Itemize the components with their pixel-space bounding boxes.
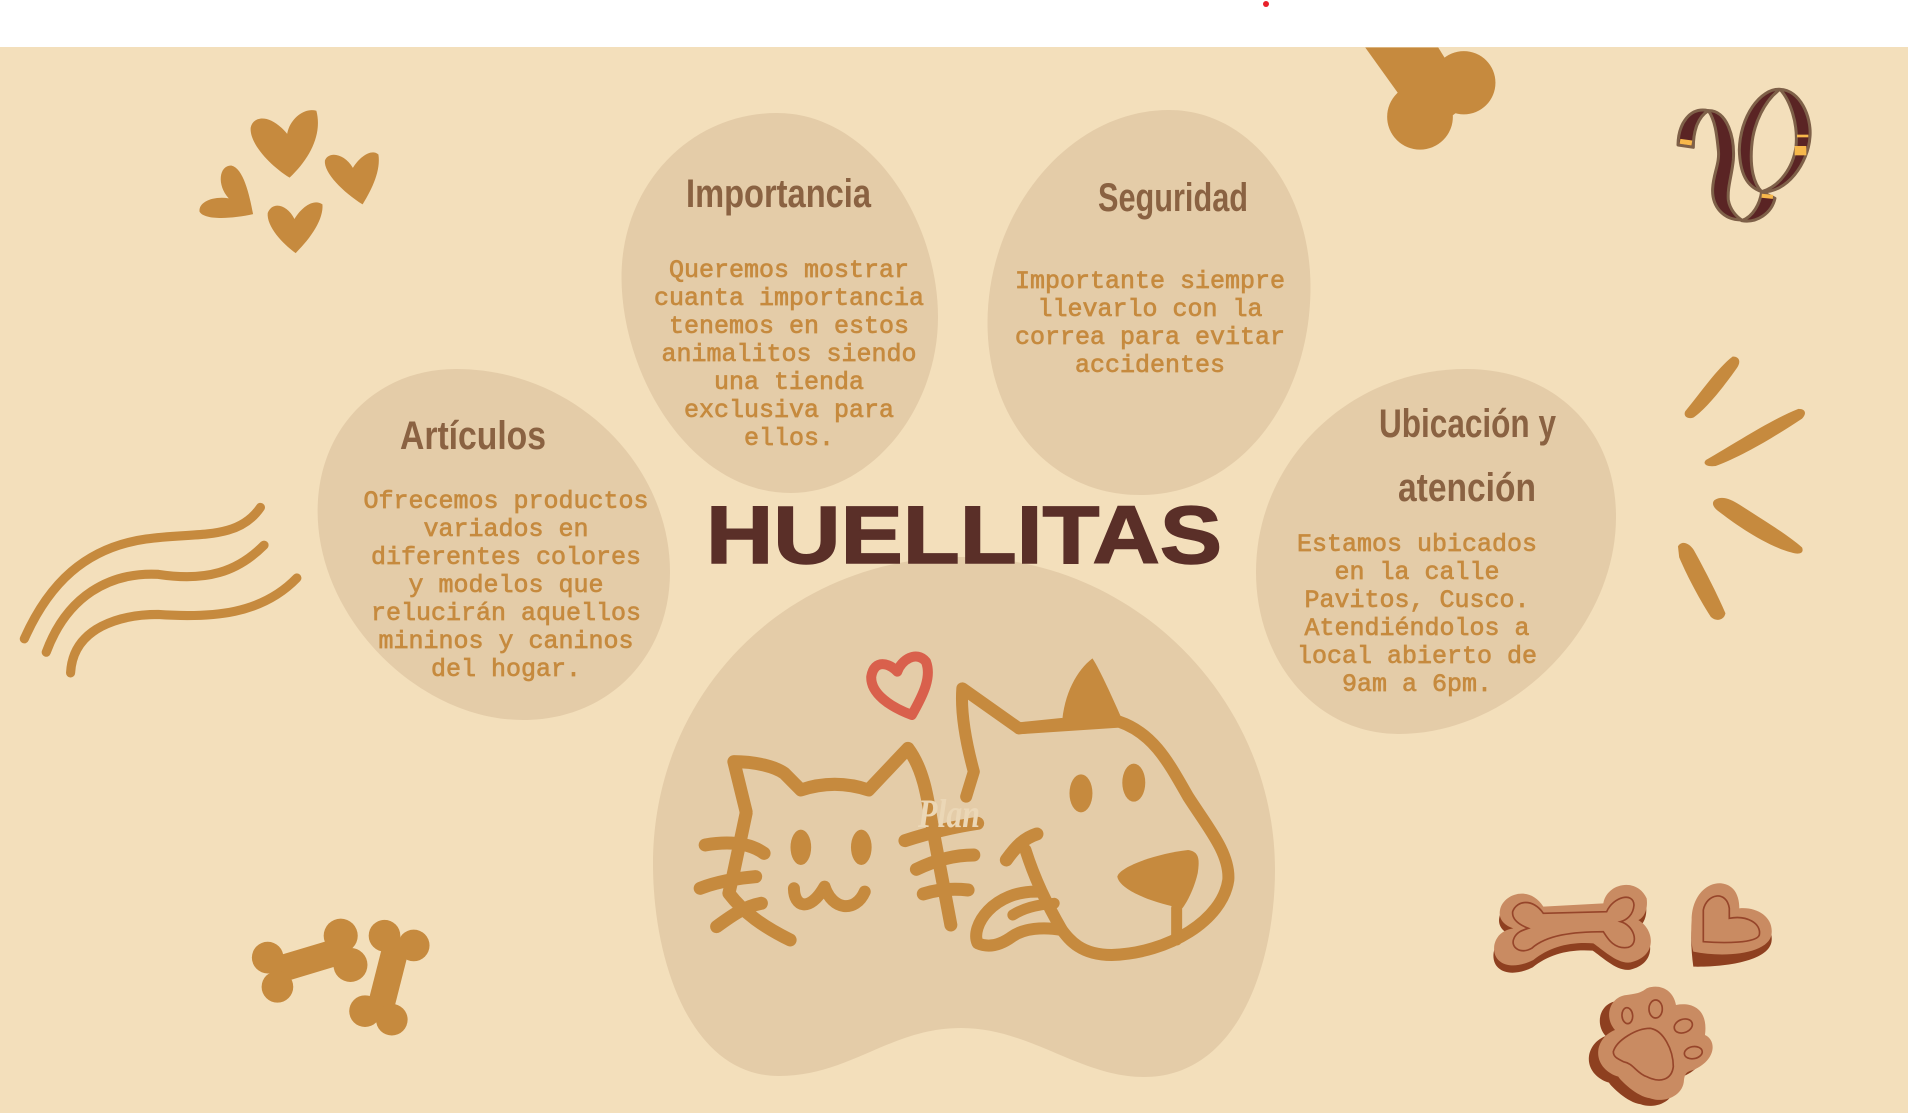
panel: importancia — [622, 113, 938, 493]
text: articulos body: variados en — [423, 515, 589, 544]
blob: importancia toe — [622, 113, 938, 493]
text: importancia body: una tienda — [714, 368, 864, 397]
heading: seguridad: Seguridad — [1098, 176, 1248, 220]
text: articulos body: diferentes colores — [371, 543, 641, 572]
watermark text: Plan — [917, 791, 980, 836]
text: ubicacion body: Estamos ubicados — [1297, 530, 1537, 559]
text: seguridad body: Importante siempre — [1015, 267, 1285, 296]
heading: ubicacion: atención — [1398, 466, 1536, 510]
icon: top bone — [1365, 47, 1495, 150]
text: ubicacion body: en la calle — [1334, 558, 1500, 587]
title: HUELLITAS — [706, 490, 1222, 581]
icon: radiating strokes — [1678, 357, 1805, 620]
text: ubicacion body: local abierto de — [1297, 642, 1537, 671]
panel: main paw pad — [653, 557, 1275, 1077]
illustration: dog — [962, 658, 1228, 955]
blob: ubicacion toe — [1256, 369, 1616, 734]
icon: collar — [1678, 89, 1810, 221]
icon: hearts — [199, 110, 379, 253]
heading: articulos: Artículos — [400, 414, 546, 458]
text: ubicacion body: 9am a 6pm. — [1342, 670, 1492, 699]
heading: importancia: Importancia — [686, 172, 872, 216]
panel: articulos — [318, 369, 670, 720]
panel: seguridad — [988, 110, 1310, 495]
text: importancia body: cuanta importancia — [654, 284, 924, 313]
text: importancia body: ellos. — [744, 424, 834, 453]
cookie: heart — [1691, 883, 1772, 967]
panel: ubicacion — [1256, 369, 1616, 734]
red dot — [1263, 1, 1269, 7]
text: seguridad body: correa para evitar — [1015, 323, 1285, 352]
illustration: cat — [700, 748, 978, 940]
text: ubicacion body: Pavitos, Cusco. — [1304, 586, 1530, 615]
icon: wavy lines — [24, 507, 297, 673]
text: ubicacion body: Atendiéndolos a — [1304, 614, 1530, 643]
text: importancia body: animalitos siendo — [661, 340, 917, 369]
text: seguridad body: llevarlo con la — [1037, 295, 1263, 324]
text: seguridad body: accidentes — [1075, 351, 1225, 380]
text: articulos body: del hogar. — [431, 655, 581, 684]
blob: seguridad toe — [988, 110, 1310, 495]
cookie: bone — [1493, 885, 1651, 973]
text: articulos body: y modelos que — [408, 571, 604, 600]
text: importancia body: Queremos mostrar — [669, 256, 909, 285]
icon: red heart — [871, 656, 928, 715]
text: articulos body: mininos y caninos — [378, 627, 634, 656]
blob: articulos toe — [318, 369, 670, 720]
text: importancia body: tenemos en estos — [669, 312, 909, 341]
text: articulos body: relucirán aquellos — [371, 599, 641, 628]
text: importancia body: exclusiva para — [684, 396, 894, 425]
heading: ubicacion: Ubicación y — [1379, 402, 1557, 446]
cookie: paw — [1589, 987, 1713, 1106]
icon: cookies — [1493, 883, 1772, 1106]
icon: crossed bones — [252, 919, 430, 1035]
text: articulos body: Ofrecemos productos — [363, 487, 649, 516]
